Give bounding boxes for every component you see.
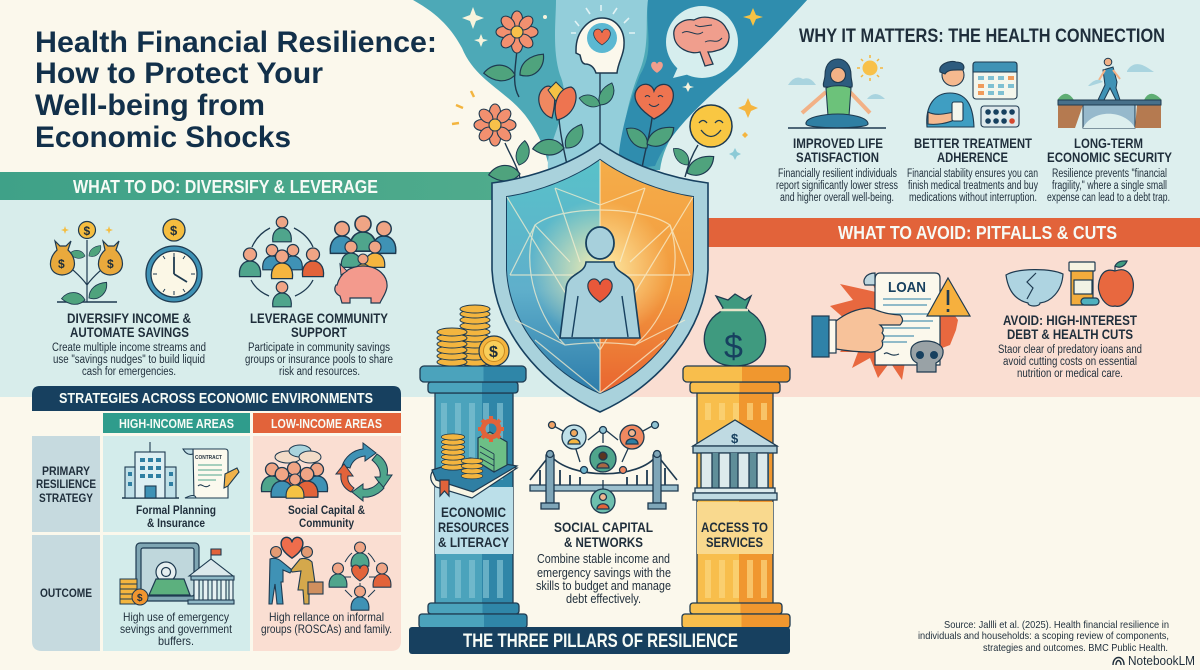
table header xyxy=(32,386,401,411)
row label: outcome xyxy=(32,535,100,651)
head with heart xyxy=(571,5,635,143)
text: social capital xyxy=(288,503,365,530)
icon: government bank xyxy=(188,549,234,604)
flower: top left xyxy=(483,11,549,97)
pillar label xyxy=(701,519,768,550)
text: formal planning xyxy=(136,503,216,530)
column head: low-income: LOW-INCOME AREAS xyxy=(271,416,382,431)
title: Economic Shocks xyxy=(35,121,291,154)
title: Well-being from xyxy=(35,89,265,122)
flower: lower left xyxy=(452,91,534,185)
icon: broken bowl, pills and apple xyxy=(1006,261,1133,306)
NotebookLM logo: NotebookLM xyxy=(1128,654,1195,668)
text: leverage community support: Participate in community savings xyxy=(248,342,390,354)
cell: formal planning xyxy=(103,436,250,532)
icon: bridge with social network xyxy=(530,422,678,513)
source citation xyxy=(918,619,1169,654)
icon: coin stacks on pillar xyxy=(437,305,509,366)
cell: social capital xyxy=(253,436,401,532)
text: leverage community support: LEVERAGE COMMUNITY xyxy=(250,310,389,326)
icon: books, coins and gear xyxy=(431,416,517,498)
text: social capital & networks: Combine stable income and xyxy=(537,552,670,566)
text: leverage community support xyxy=(245,310,393,378)
icon: person crossing bridge xyxy=(1058,58,1161,128)
text: formal planning: & Insurance xyxy=(147,516,205,530)
icon: predatory loan warning xyxy=(812,273,970,380)
pillar label xyxy=(438,504,510,550)
icon: meditating woman xyxy=(788,55,886,128)
text: social capital: Community xyxy=(299,516,354,530)
text: leverage community support: risk and resources. xyxy=(279,366,360,378)
icon: money bag on pillar xyxy=(704,294,766,366)
source citation: strategies and outcomes. BMC Public Health. xyxy=(983,642,1168,654)
text: social capital & networks: debt effectively. xyxy=(566,592,641,606)
text: avoid high-interest debt: AVOID: HIGH-INTEREST xyxy=(1003,312,1137,328)
text: diversify income: use "savings nudges" to build liquid xyxy=(53,354,205,366)
person silhouette with heart xyxy=(560,227,640,338)
icon: support network with heart xyxy=(329,542,391,610)
text: better treatment adherence: Financial stability ensures you can xyxy=(907,168,1038,180)
title: Health Financial Resilience: xyxy=(35,26,437,59)
cell: low-income outcome background xyxy=(253,535,401,651)
table header: STRATEGIES ACROSS ECONOMIC ENVIRONMENTS xyxy=(59,390,373,407)
text: high-income outcome xyxy=(120,610,233,648)
title: How to Protect Your xyxy=(35,57,323,90)
speech bubble with brain xyxy=(666,6,738,78)
text: improved life satisfaction: Financially resilient individuals xyxy=(778,168,897,180)
text: avoid high-interest debt: DEBT & HEALTH CUTS xyxy=(1007,326,1133,342)
column head: low-income xyxy=(253,413,401,433)
shield xyxy=(492,143,708,412)
pillar label: ACCESS TO xyxy=(701,519,768,535)
text: long-term economic security xyxy=(1047,135,1173,204)
orange banner: what to avoid xyxy=(700,218,1200,247)
text: high-income outcome: High use of emergency xyxy=(123,610,229,624)
text: leverage community support: groups or insurance pools to share xyxy=(245,354,393,366)
text: diversify income: DIVERSIFY INCOME & xyxy=(67,310,191,326)
icon: man with calendar and pills xyxy=(927,61,1019,127)
row label: primary strategy: STRATEGY xyxy=(39,491,93,505)
text: low-income outcome xyxy=(261,610,392,636)
icon: bank on pillar xyxy=(693,420,777,500)
text: long-term economic security: ECONOMIC SECURITY xyxy=(1047,149,1173,165)
banner: the three pillars: THE THREE PILLARS OF RESILIENCE xyxy=(463,631,738,652)
icon: safe xyxy=(136,543,199,601)
text: social capital & networks: & NETWORKS xyxy=(564,534,643,550)
text: improved life satisfaction: SATISFACTION xyxy=(796,149,879,165)
text: avoid high-interest debt xyxy=(998,312,1142,380)
source citation: Source: Jallli et al. (2025). Health financial resilience in xyxy=(944,619,1169,631)
text: low-income outcome: groups (ROSCAs) and family. xyxy=(261,622,392,636)
text: formal planning: Formal Planning xyxy=(136,503,216,517)
pillar: access to services xyxy=(682,366,790,628)
icon: group with piggy bank xyxy=(330,216,396,303)
row label: outcome: OUTCOME xyxy=(40,586,92,600)
flowers above shield xyxy=(452,5,763,185)
panel: why it matters background xyxy=(640,0,1200,247)
icon: contract with pen xyxy=(183,449,239,498)
text: high-income outcome: sevings and government xyxy=(120,622,233,636)
cell: high-income outcome xyxy=(103,535,250,651)
source citation: individuals and households: a scoping review of components, xyxy=(918,630,1169,642)
tulip xyxy=(532,82,590,165)
column head: high-income: HIGH-INCOME AREAS xyxy=(119,416,234,431)
text: diversify income xyxy=(52,310,206,378)
panel: strategies table xyxy=(32,386,401,651)
pillar label: RESOURCES xyxy=(438,519,509,535)
text: better treatment adherence: ADHERENCE xyxy=(937,149,1008,165)
text: social capital: Social Capital & xyxy=(288,503,365,517)
icon: predatory loan warning: LOAN xyxy=(888,279,926,296)
row label: primary strategy xyxy=(32,436,100,532)
text: diversify income: Create multiple income streams and xyxy=(52,342,206,354)
text: social capital & networks xyxy=(536,519,671,606)
text: improved life satisfaction: report significantly lower stress xyxy=(776,180,898,192)
icon: bank on pillar: $ xyxy=(731,431,739,446)
shield facets xyxy=(507,160,693,393)
panel: what to do background xyxy=(0,200,600,397)
text: improved life satisfaction: IMPROVED LIFE xyxy=(793,135,883,151)
heart flower xyxy=(625,84,677,168)
panel: what to avoid background xyxy=(600,247,1200,397)
icon: office building xyxy=(122,442,179,498)
pillar label: SERVICES xyxy=(706,534,763,550)
icon: cycle arrows xyxy=(336,443,392,501)
icon: money bag on pillar: $ xyxy=(724,328,743,366)
row label: primary strategy: RESILIENCE xyxy=(36,477,96,491)
text: social capital & networks: SOCIAL CAPITAL xyxy=(554,519,653,535)
title xyxy=(35,26,437,154)
icon: money plant: $ xyxy=(84,224,90,238)
text: low-income outcome: High rellance on informal xyxy=(269,610,384,624)
pillar label: & LITERACY xyxy=(438,534,510,550)
text: long-term economic security: LONG-TERM xyxy=(1074,135,1143,151)
text: better treatment adherence: finish medical treatments and buy xyxy=(908,180,1038,192)
sparkles and small heart xyxy=(462,7,763,160)
text: improved life satisfaction: and higher overall well-being. xyxy=(780,192,894,204)
green banner: what to do: WHAT TO DO: DIVERSIFY & LEVERAGE xyxy=(73,177,378,197)
text: social capital & networks: emergency savings with the xyxy=(537,566,671,580)
text: leverage community support: SUPPORT xyxy=(291,324,347,340)
text: better treatment adherence xyxy=(907,135,1038,204)
icon: handshake couple xyxy=(269,537,323,604)
icon: coin stacks on pillar: $ xyxy=(489,344,498,361)
text: social capital & networks: skills to budget and manage xyxy=(536,579,671,593)
text: improved life satisfaction xyxy=(776,135,898,204)
text: high-income outcome: buffers. xyxy=(158,634,194,648)
icon: money plant: $ xyxy=(107,257,114,271)
text: better treatment adherence: medications without interruption. xyxy=(909,192,1037,204)
text: avoid high-interest debt: Staor clear of predatory ioans and xyxy=(998,344,1142,356)
text: better treatment adherence: BETTER TREATMENT xyxy=(914,135,1032,151)
icon: contract with pen: CONTRACT xyxy=(195,455,223,461)
icon: coins: $ xyxy=(137,593,143,604)
cell: low-income outcome xyxy=(261,537,392,636)
text: long-term economic security: Resilience prevents "financial xyxy=(1052,168,1167,180)
icon: clock with coin: $ xyxy=(170,223,178,238)
decorative wave behind the flowers xyxy=(413,0,807,170)
row label: primary strategy: PRIMARY xyxy=(42,464,90,478)
text: diversify income: cash for emergencies. xyxy=(82,366,176,378)
orange banner: what to avoid: WHAT TO AVOID: PITFALLS & CUTS xyxy=(838,223,1117,243)
text: long-term economic security: fragility," where a single small xyxy=(1052,180,1167,192)
column head: high-income xyxy=(103,413,250,433)
green banner: what to do xyxy=(0,172,500,200)
icon: crowd with speech bubbles xyxy=(261,445,328,498)
banner: the three pillars xyxy=(409,627,790,654)
icon: community circle xyxy=(239,216,324,307)
icon: coins xyxy=(120,579,148,605)
text: avoid high-interest debt: avoid cutting costs on essential xyxy=(1003,356,1137,368)
pillar label: ECONOMIC xyxy=(441,504,506,520)
text: avoid high-interest debt: nutrition or medical care. xyxy=(1017,368,1123,380)
smiley flower xyxy=(672,105,732,178)
icon: money plant xyxy=(50,222,122,308)
text: diversify income: AUTOMATE SAVINGS xyxy=(70,324,189,340)
icon: money plant: $ xyxy=(58,257,65,271)
icon: clock with coin xyxy=(146,219,202,302)
pillar: economic resources xyxy=(419,366,527,628)
